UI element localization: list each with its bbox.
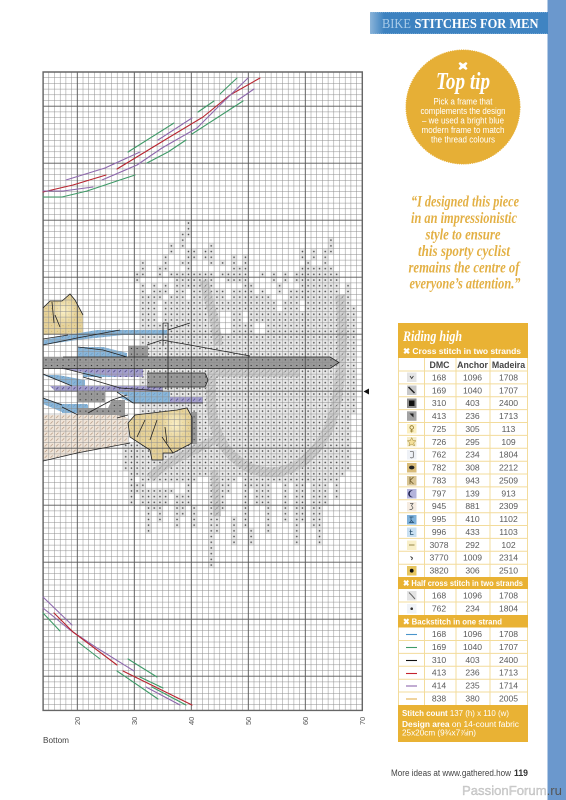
cross stitch rows: 797	[432, 488, 446, 498]
cross stitch rows: 1708	[499, 372, 518, 382]
cross stitch rows: 996	[432, 527, 446, 537]
hatched wheel rim	[150, 280, 342, 516]
header banner: STITCHES FOR MEN	[414, 17, 538, 32]
column headings: Anchor	[457, 360, 488, 370]
axis labels: 50	[244, 717, 253, 725]
cross stitch rows: 2400	[499, 398, 518, 408]
backstitch rows: 1040	[463, 642, 482, 652]
column headings: DMC	[429, 360, 450, 370]
backstitch rows: 1713	[499, 668, 518, 678]
cross stitch rows: 3078	[429, 540, 449, 550]
half cross stitch rows: 1708	[499, 591, 518, 601]
cross stitch rows: 2509	[499, 475, 518, 485]
cross stitch rows: 168	[432, 372, 446, 382]
cross stitch rows	[429, 372, 518, 576]
tip text: – we used a bright blue	[422, 116, 504, 126]
cross stitch rows: 109	[501, 437, 516, 447]
cross stitch rows: 762	[432, 450, 446, 460]
rider's lower hand	[52, 299, 192, 460]
pull quote: “I designed this piece	[411, 194, 519, 210]
header banner: BIKE	[382, 17, 411, 32]
cross stitch rows: 102	[501, 540, 516, 550]
table heading	[398, 323, 528, 358]
backstitch rows: 1714	[499, 681, 518, 691]
cross stitch rows: 308	[465, 463, 480, 473]
grid lines	[43, 72, 362, 710]
half cross stitch rows: 234	[465, 604, 480, 614]
half cross stitch rows: 762	[432, 604, 446, 614]
backstitch heading: ✖ Backstitch in one strand	[403, 616, 502, 626]
backstitch rows	[406, 629, 518, 704]
cross stitch rows: 295	[465, 437, 480, 447]
column headings: Madeira	[492, 360, 525, 370]
cross stitch rows: 292	[465, 540, 480, 550]
cross stitch rows: 2314	[499, 553, 518, 563]
panel: thread key table	[398, 323, 528, 742]
icon: cross stitch mark	[458, 62, 468, 70]
backstitch rows: 414	[432, 681, 446, 691]
axis labels: 70	[358, 717, 367, 725]
tip text: Pick a frame that	[434, 96, 493, 106]
cross stitch rows: 945	[432, 501, 446, 511]
column headings	[429, 360, 525, 370]
cross stitch rows: 1102	[499, 514, 518, 524]
half cross stitch rows	[407, 591, 518, 614]
cross stitch rows: 2510	[499, 566, 518, 576]
gaps in dotted field	[146, 289, 305, 488]
header banner	[370, 12, 548, 34]
handlebar	[43, 357, 339, 368]
cross stitch rows: 113	[502, 424, 516, 434]
cross stitch rows: 139	[465, 488, 480, 498]
backstitch rows: 235	[465, 681, 480, 691]
centre marker arrow	[364, 388, 369, 394]
cross stitch rows: 310	[432, 398, 446, 408]
caption: bottom: Bottom	[43, 736, 69, 745]
tip text	[420, 96, 506, 144]
cross stitch rows: 1040	[463, 385, 482, 395]
cross stitch rows: 3820	[429, 566, 449, 576]
backstitch heading	[398, 615, 528, 628]
backstitch rows: 380	[465, 694, 480, 704]
cross stitch rows: 783	[432, 475, 446, 485]
cross stitch rows: 2309	[499, 501, 518, 511]
pull quote: everyone’s attention.”	[410, 276, 521, 292]
backstitch rows: 2400	[499, 655, 518, 665]
rider's upper hand	[43, 294, 83, 335]
pull quote: remains the centre of	[408, 260, 521, 276]
cross stitch rows: 881	[465, 501, 480, 511]
watermark: PassionForum .ru	[462, 784, 562, 798]
purple shading on frame	[50, 369, 203, 403]
backstitch rows: 403	[465, 655, 480, 665]
cross stitch rows: 1707	[499, 385, 518, 395]
backstitch rows: 1708	[499, 629, 518, 639]
cross stitch rows: 1009	[463, 553, 482, 563]
cross stitch rows: 943	[465, 475, 480, 485]
backstitch: bottom curved wheel lines	[43, 597, 192, 705]
cross stitch rows: 1103	[499, 527, 518, 537]
backstitch rows: 169	[432, 642, 446, 652]
cross stitch rows: 1804	[499, 450, 518, 460]
grey gear blocks	[78, 346, 208, 444]
footer: page credit and number: 119	[514, 768, 528, 778]
axis labels: 40	[187, 717, 196, 725]
backstitch rows: 168	[432, 629, 446, 639]
backstitch rows: 1096	[463, 629, 482, 639]
rider's forearm	[43, 415, 128, 460]
stitch count footer: 25x20cm (9¾x7⅞in)	[402, 728, 476, 738]
blue frame and sleeves	[43, 330, 170, 413]
footer: page credit and number: More ideas at www.gathered.how	[391, 768, 511, 778]
cross stitch rows: 236	[465, 411, 480, 421]
axis labels	[73, 717, 367, 725]
cross stitch rows: 1713	[499, 411, 518, 421]
stitch count footer	[398, 705, 528, 742]
stitched background: dotted cells	[123, 220, 357, 568]
cross stitch rows: 306	[465, 566, 480, 576]
cross stitch rows: 403	[465, 398, 480, 408]
pull quote	[408, 194, 521, 292]
cross stitch rows: 305	[465, 424, 480, 434]
half cross stitch heading: ✖ Half cross stitch in two strands	[403, 578, 523, 588]
sidebar: blue page edge	[548, 0, 566, 800]
cross stitch rows: 995	[432, 514, 446, 524]
backstitch: top curved wheel lines	[43, 78, 260, 197]
black backstitch outlines	[43, 294, 339, 461]
tip heading: Top tip	[436, 69, 490, 95]
tip text: modern frame to match	[422, 125, 505, 135]
backstitch rows: 838	[432, 694, 446, 704]
stitch count footer: Design area on 14-count fabric	[402, 720, 519, 729]
cross stitch rows: 913	[501, 488, 516, 498]
half cross stitch rows: 1804	[499, 604, 518, 614]
cross stitch rows: 1096	[463, 372, 482, 382]
half cross stitch rows: 168	[432, 591, 446, 601]
cross stitch rows: 2212	[499, 463, 518, 473]
cross stitch rows: 782	[432, 463, 446, 473]
cross stitch rows: 726	[432, 437, 446, 447]
axis labels: 30	[130, 717, 139, 725]
backstitch rows: 2005	[499, 694, 518, 704]
table heading: ✖ Cross stitch in two strands	[403, 346, 521, 356]
cross stitch rows: 433	[465, 527, 480, 537]
backstitch rows: 310	[432, 655, 446, 665]
tip text: complements the design	[420, 106, 506, 116]
callout: top tip	[406, 50, 520, 164]
table heading: Riding high	[402, 329, 462, 345]
cross stitch rows: 169	[432, 385, 446, 395]
cross stitch rows: 725	[432, 424, 446, 434]
table grid	[398, 358, 528, 705]
half cross stitch rows: 1096	[463, 591, 482, 601]
pull quote: in an impressionistic	[411, 210, 517, 227]
axis labels: 60	[301, 717, 310, 725]
cross stitch rows: 3770	[429, 553, 449, 563]
cross stitch rows: 410	[465, 514, 480, 524]
stitch count footer: Stitch count 137 (h) x 110 (w)	[402, 709, 509, 718]
backstitch rows: 1707	[499, 642, 518, 652]
cross stitch symbols	[407, 372, 416, 576]
axis labels: 20	[73, 717, 82, 725]
pull quote: style to ensure	[425, 226, 501, 244]
tip text: the thread colours	[431, 134, 496, 144]
pull quote: this sporty cyclist	[418, 243, 511, 260]
cross stitch rows: 234	[465, 450, 480, 460]
cross stitch rows: 413	[432, 411, 446, 421]
chart: cross stitch grid	[43, 72, 362, 710]
backstitch rows: 236	[465, 668, 480, 678]
backstitch rows: 413	[432, 668, 446, 678]
